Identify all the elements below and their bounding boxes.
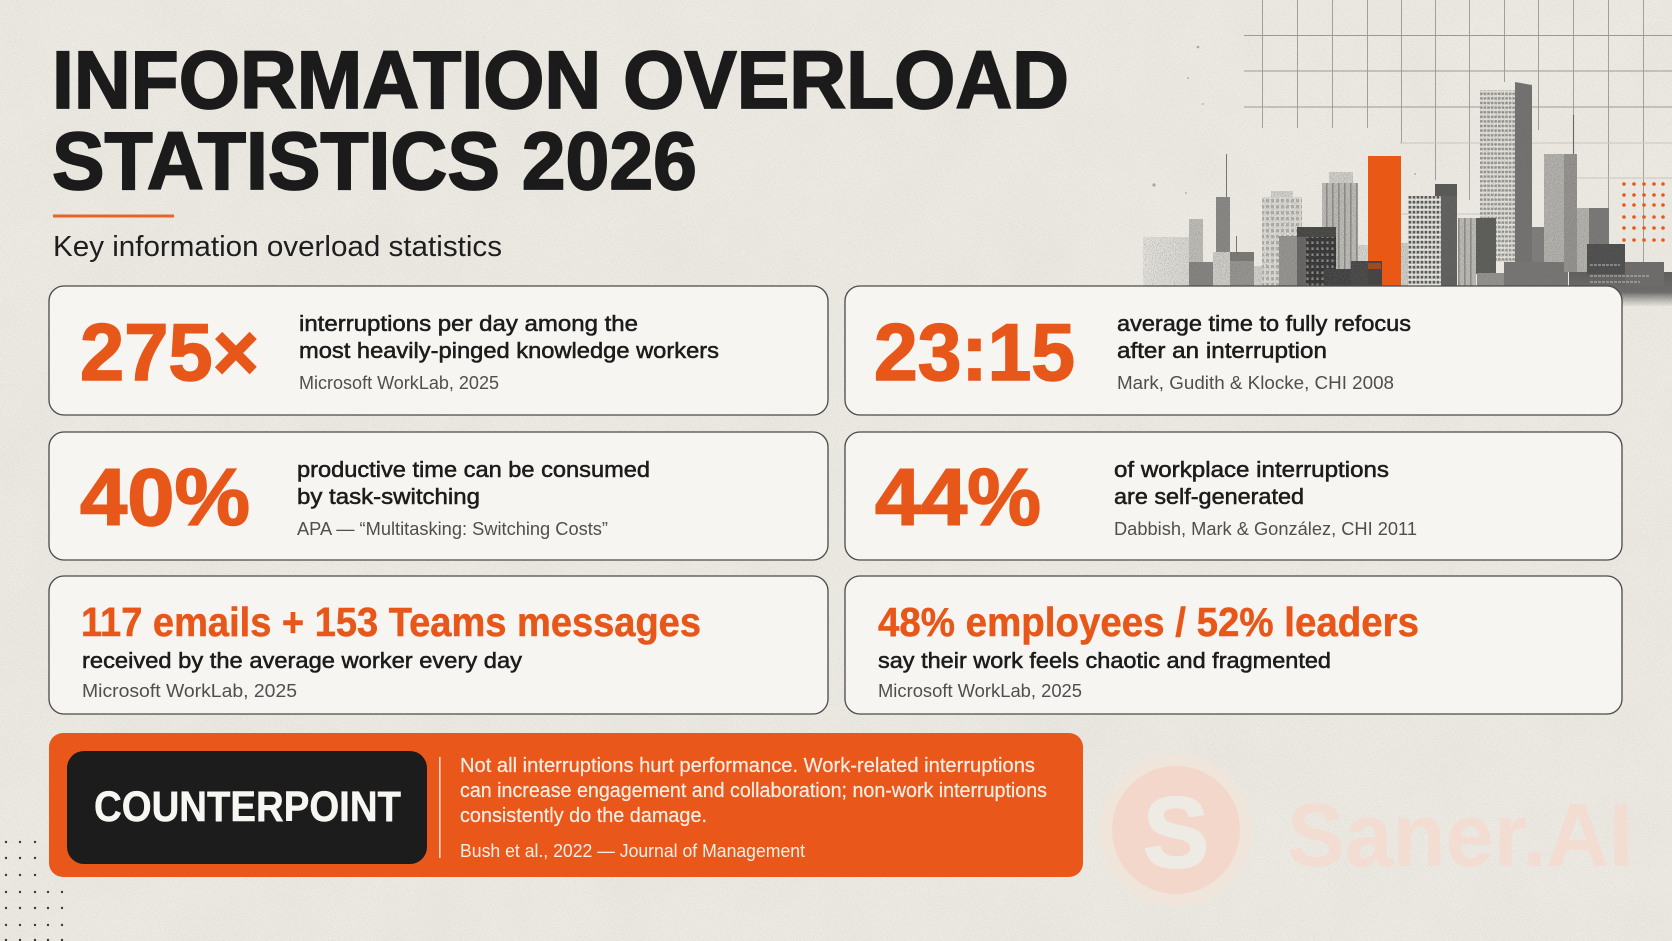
card: 23:15 refocus time: average time to fully refocus bbox=[1117, 311, 1411, 336]
card: 44% self-generated: 44% bbox=[875, 453, 1041, 543]
title accent rule bbox=[53, 214, 174, 218]
card: 40% task-switching: APA — “Multitasking: Switching Costs” bbox=[297, 518, 608, 539]
counterpoint text: consistently do the damage. bbox=[460, 805, 707, 827]
card: 44% self-generated: are self-generated bbox=[1114, 484, 1304, 509]
card: 275 interruptions: interruptions per day among the bbox=[299, 311, 638, 336]
title bbox=[52, 35, 1069, 207]
card: emails and Teams messages: 117 emails + 153 Teams messages bbox=[81, 599, 701, 645]
skyline illustration bbox=[1143, 82, 1672, 306]
subtitle: Key information overload statistics bbox=[53, 231, 502, 263]
card: chaotic and fragmented work bbox=[845, 576, 1622, 714]
building group: centre-right towers bbox=[1401, 82, 1577, 286]
card: 40% task-switching bbox=[49, 432, 828, 560]
building group: left towers bbox=[1143, 154, 1263, 286]
card: 40% task-switching: productive time can be consumed bbox=[297, 457, 650, 482]
panel: counterpoint bbox=[49, 733, 1083, 877]
card: 44% self-generated: of workplace interruptions bbox=[1114, 457, 1389, 482]
card: emails and Teams messages: received by the average worker every day bbox=[82, 648, 523, 673]
card: 44% self-generated: Dabbish, Mark & González, CHI 2011 bbox=[1114, 518, 1417, 539]
building group: centre-left towers bbox=[1262, 172, 1382, 286]
counterpoint text: can increase engagement and collaboration; non-work interruptions bbox=[460, 780, 1047, 802]
counterpoint text: Not all interruptions hurt performance. Work-related interruptions bbox=[460, 755, 1035, 777]
card: chaotic and fragmented work: say their work feels chaotic and fragmented bbox=[878, 648, 1331, 673]
card: 23:15 refocus time: 23:15 bbox=[874, 308, 1075, 398]
card: 23:15 refocus time: Mark, Gudith & Klocke, CHI 2008 bbox=[1117, 372, 1394, 393]
title: STATISTICS 2026 bbox=[52, 116, 697, 207]
counterpoint divider bbox=[439, 757, 441, 858]
card: 275 interruptions: Microsoft WorkLab, 2025 bbox=[299, 372, 499, 393]
card: emails and Teams messages bbox=[49, 576, 828, 714]
counterpoint badge: COUNTERPOINT bbox=[94, 783, 401, 831]
card: 275 interruptions: most heavily-pinged knowledge workers bbox=[299, 338, 719, 363]
card: 40% task-switching: 40% bbox=[80, 453, 250, 543]
title: INFORMATION OVERLOAD bbox=[52, 35, 1069, 126]
card: 275 interruptions: 275× bbox=[80, 308, 259, 398]
counterpoint text: Bush et al., 2022 — Journal of Management bbox=[460, 841, 805, 861]
counterpoint text bbox=[460, 755, 1047, 861]
card: 23:15 refocus time: after an interruption bbox=[1117, 338, 1327, 363]
watermark: Saner.AI logo bbox=[1100, 754, 1633, 906]
orange halftone dots bbox=[1622, 182, 1665, 242]
dot grid: bottom left bbox=[5, 841, 63, 941]
building group: right towers bbox=[1569, 208, 1672, 306]
card: 44% self-generated bbox=[845, 432, 1622, 560]
card: chaotic and fragmented work: 48% employees / 52% leaders bbox=[878, 599, 1419, 645]
card: chaotic and fragmented work: Microsoft WorkLab, 2025 bbox=[878, 680, 1082, 701]
card: 23:15 refocus time bbox=[845, 286, 1622, 415]
grid lines behind the skyline bbox=[1244, 0, 1672, 262]
highlighted orange building bbox=[1368, 156, 1401, 286]
counterpoint badge bbox=[67, 751, 427, 864]
card: 40% task-switching: by task-switching bbox=[297, 484, 480, 509]
card: 275 interruptions bbox=[49, 286, 828, 415]
card: emails and Teams messages: Microsoft WorkLab, 2025 bbox=[82, 680, 297, 701]
watermark: Saner.AI logo: S bbox=[1143, 777, 1209, 889]
watermark: Saner.AI logo: Saner.AI bbox=[1287, 786, 1633, 886]
